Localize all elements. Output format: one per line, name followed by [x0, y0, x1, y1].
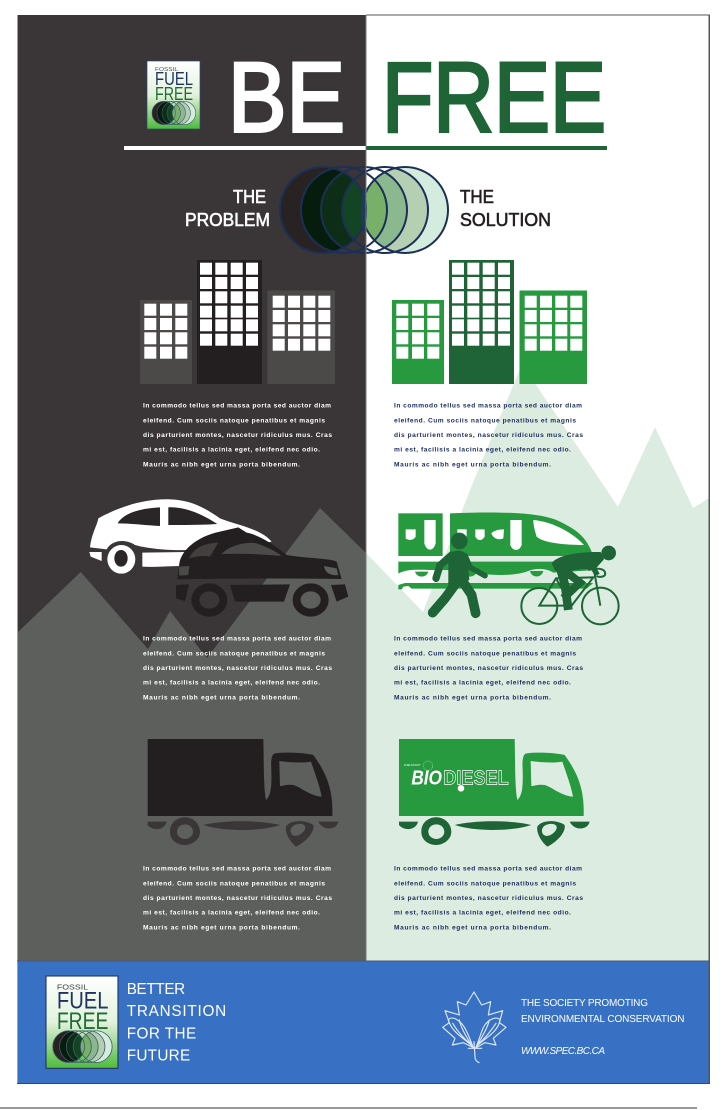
- text block: problem 2: In commodo tellus sed massa porta sed auctor diam: [143, 636, 331, 643]
- icon: fossil fuel free logo small: FOSSIL: [155, 67, 178, 73]
- text block: problem 2: Mauris ac nibh eget urna porta bibendum.: [143, 694, 300, 701]
- icon: fossil fuel free logo large: FUEL: [57, 988, 108, 1015]
- icon: fossil fuel free logo large: FOSSIL: [57, 983, 88, 992]
- icon: biodiesel truck: [399, 739, 590, 847]
- icon: fossil fuel free logo small: [147, 61, 200, 129]
- text block: problem 2: [143, 636, 332, 701]
- text block: problem 2: dis parturient montes, nascetur ridiculus mus. Cras: [143, 665, 332, 672]
- heading: the problem: [185, 186, 270, 230]
- text block: solution 3: dis parturient montes, nascetur ridiculus mus. Cras: [394, 895, 583, 902]
- icon: cyclist: [521, 546, 619, 624]
- footer organisation name: THE SOCIETY PROMOTING: [521, 998, 648, 1009]
- text block: solution 2: Mauris ac nibh eget urna porta bibendum.: [394, 694, 551, 701]
- footer slogan: FUTURE: [127, 1048, 190, 1065]
- icon: train: [398, 513, 597, 589]
- text block: solution 3: eleifend. Cum sociis natoque penatibus et magnis: [394, 880, 576, 887]
- text block: solution 1: [394, 403, 583, 468]
- text block: solution 3: In commodo tellus sed massa porta sed auctor diam: [394, 866, 582, 873]
- title: FREE: FREE: [382, 42, 606, 152]
- text block: problem 1: dis parturient montes, nascetur ridiculus mus. Cras: [143, 432, 332, 439]
- footer slogan: BETTER: [127, 981, 185, 998]
- text block: solution 2: eleifend. Cum sociis natoque penatibus et magnis: [394, 650, 576, 657]
- text block: solution 3: [394, 866, 583, 931]
- text block: problem 1: eleifend. Cum sociis natoque penatibus et magnis: [143, 417, 325, 424]
- icon: maple leaf logo: [443, 992, 506, 1063]
- icon: dark car: [176, 527, 348, 613]
- text block: solution 1: Mauris ac nibh eget urna porta bibendum.: [394, 461, 551, 468]
- footer organisation name: ENVIRONMENTAL CONSERVATION: [521, 1014, 684, 1025]
- text block: problem 3: In commodo tellus sed massa porta sed auctor diam: [143, 866, 331, 873]
- text block: problem 3: eleifend. Cum sociis natoque penatibus et magnis: [143, 880, 325, 887]
- text block: problem 1: In commodo tellus sed massa porta sed auctor diam: [143, 403, 331, 410]
- mountains: solution side: [366, 364, 709, 961]
- text block: solution 2: mi est, facilisis a lacinia eget, eleifend nec odio.: [394, 680, 571, 687]
- text block: solution 3: mi est, facilisis a lacinia eget, eleifend nec odio.: [394, 910, 571, 917]
- heading: the solution: [460, 186, 551, 230]
- panel: footer: [18, 961, 709, 1083]
- text block: problem 3: dis parturient montes, nascetur ridiculus mus. Cras: [143, 895, 332, 902]
- footer slogan: [127, 981, 226, 1065]
- text block: solution 1: dis parturient montes, nascetur ridiculus mus. Cras: [394, 432, 583, 439]
- icon: fossil fuel free logo large: [46, 976, 118, 1068]
- text block: problem 3: mi est, facilisis a lacinia eget, eleifend nec odio.: [143, 910, 320, 917]
- icon: diesel truck: [148, 739, 338, 847]
- text block: solution 1: In commodo tellus sed massa porta sed auctor diam: [394, 403, 582, 410]
- heading: the solution: SOLUTION: [460, 209, 551, 230]
- heading: the problem: PROBLEM: [185, 209, 270, 230]
- icon: fossil fuel free logo small: FREE: [155, 84, 193, 104]
- title: BE: BE: [228, 42, 345, 152]
- text block: problem 2: eleifend. Cum sociis natoque penatibus et magnis: [143, 650, 325, 657]
- icon: fossil fuel free logo large: FREE: [57, 1008, 108, 1035]
- icon: white car: [89, 499, 272, 574]
- heading: the problem: THE: [233, 186, 266, 207]
- heading: the solution: THE: [460, 186, 494, 207]
- text block: problem 2: mi est, facilisis a lacinia eget, eleifend nec odio.: [143, 680, 320, 687]
- icon: solution buildings: [392, 260, 587, 384]
- biodiesel wordmark: BIO: [411, 766, 442, 789]
- footer slogan: FOR THE: [127, 1025, 196, 1042]
- title rule: [124, 146, 607, 150]
- footer organisation name: [521, 998, 684, 1025]
- footer website: WWW.SPEC.BC.CA: [521, 1046, 605, 1057]
- text block: problem 3: [143, 866, 332, 931]
- text block: solution 2: In commodo tellus sed massa porta sed auctor diam: [394, 636, 582, 643]
- biodiesel wordmark: [404, 761, 509, 792]
- icon: walking person: [433, 533, 485, 613]
- text block: problem 1: mi est, facilisis a lacinia eget, eleifend nec odio.: [143, 447, 320, 454]
- panel: the problem background: [18, 15, 366, 961]
- text block: problem 1: Mauris ac nibh eget urna porta bibendum.: [143, 461, 300, 468]
- biodiesel wordmark: FUELSCOUT: [404, 763, 421, 767]
- icon: fossil fuel free logo small: FUEL: [155, 69, 193, 89]
- text block: solution 1: mi est, facilisis a lacinia eget, eleifend nec odio.: [394, 447, 571, 454]
- text block: solution 2: [394, 636, 583, 701]
- text block: solution 1: eleifend. Cum sociis natoque penatibus et magnis: [394, 417, 576, 424]
- biodiesel wordmark: DIESEL: [443, 766, 509, 789]
- footer slogan: TRANSITION: [127, 1003, 226, 1020]
- mountains: problem side: [18, 508, 366, 961]
- icon: overlapping circles: [279, 166, 449, 254]
- text block: solution 3: Mauris ac nibh eget urna porta bibendum.: [394, 924, 551, 931]
- text block: problem 3: Mauris ac nibh eget urna porta bibendum.: [143, 924, 300, 931]
- text block: problem 1: [143, 403, 332, 468]
- icon: problem buildings: [140, 260, 335, 384]
- text block: solution 2: dis parturient montes, nascetur ridiculus mus. Cras: [394, 665, 583, 672]
